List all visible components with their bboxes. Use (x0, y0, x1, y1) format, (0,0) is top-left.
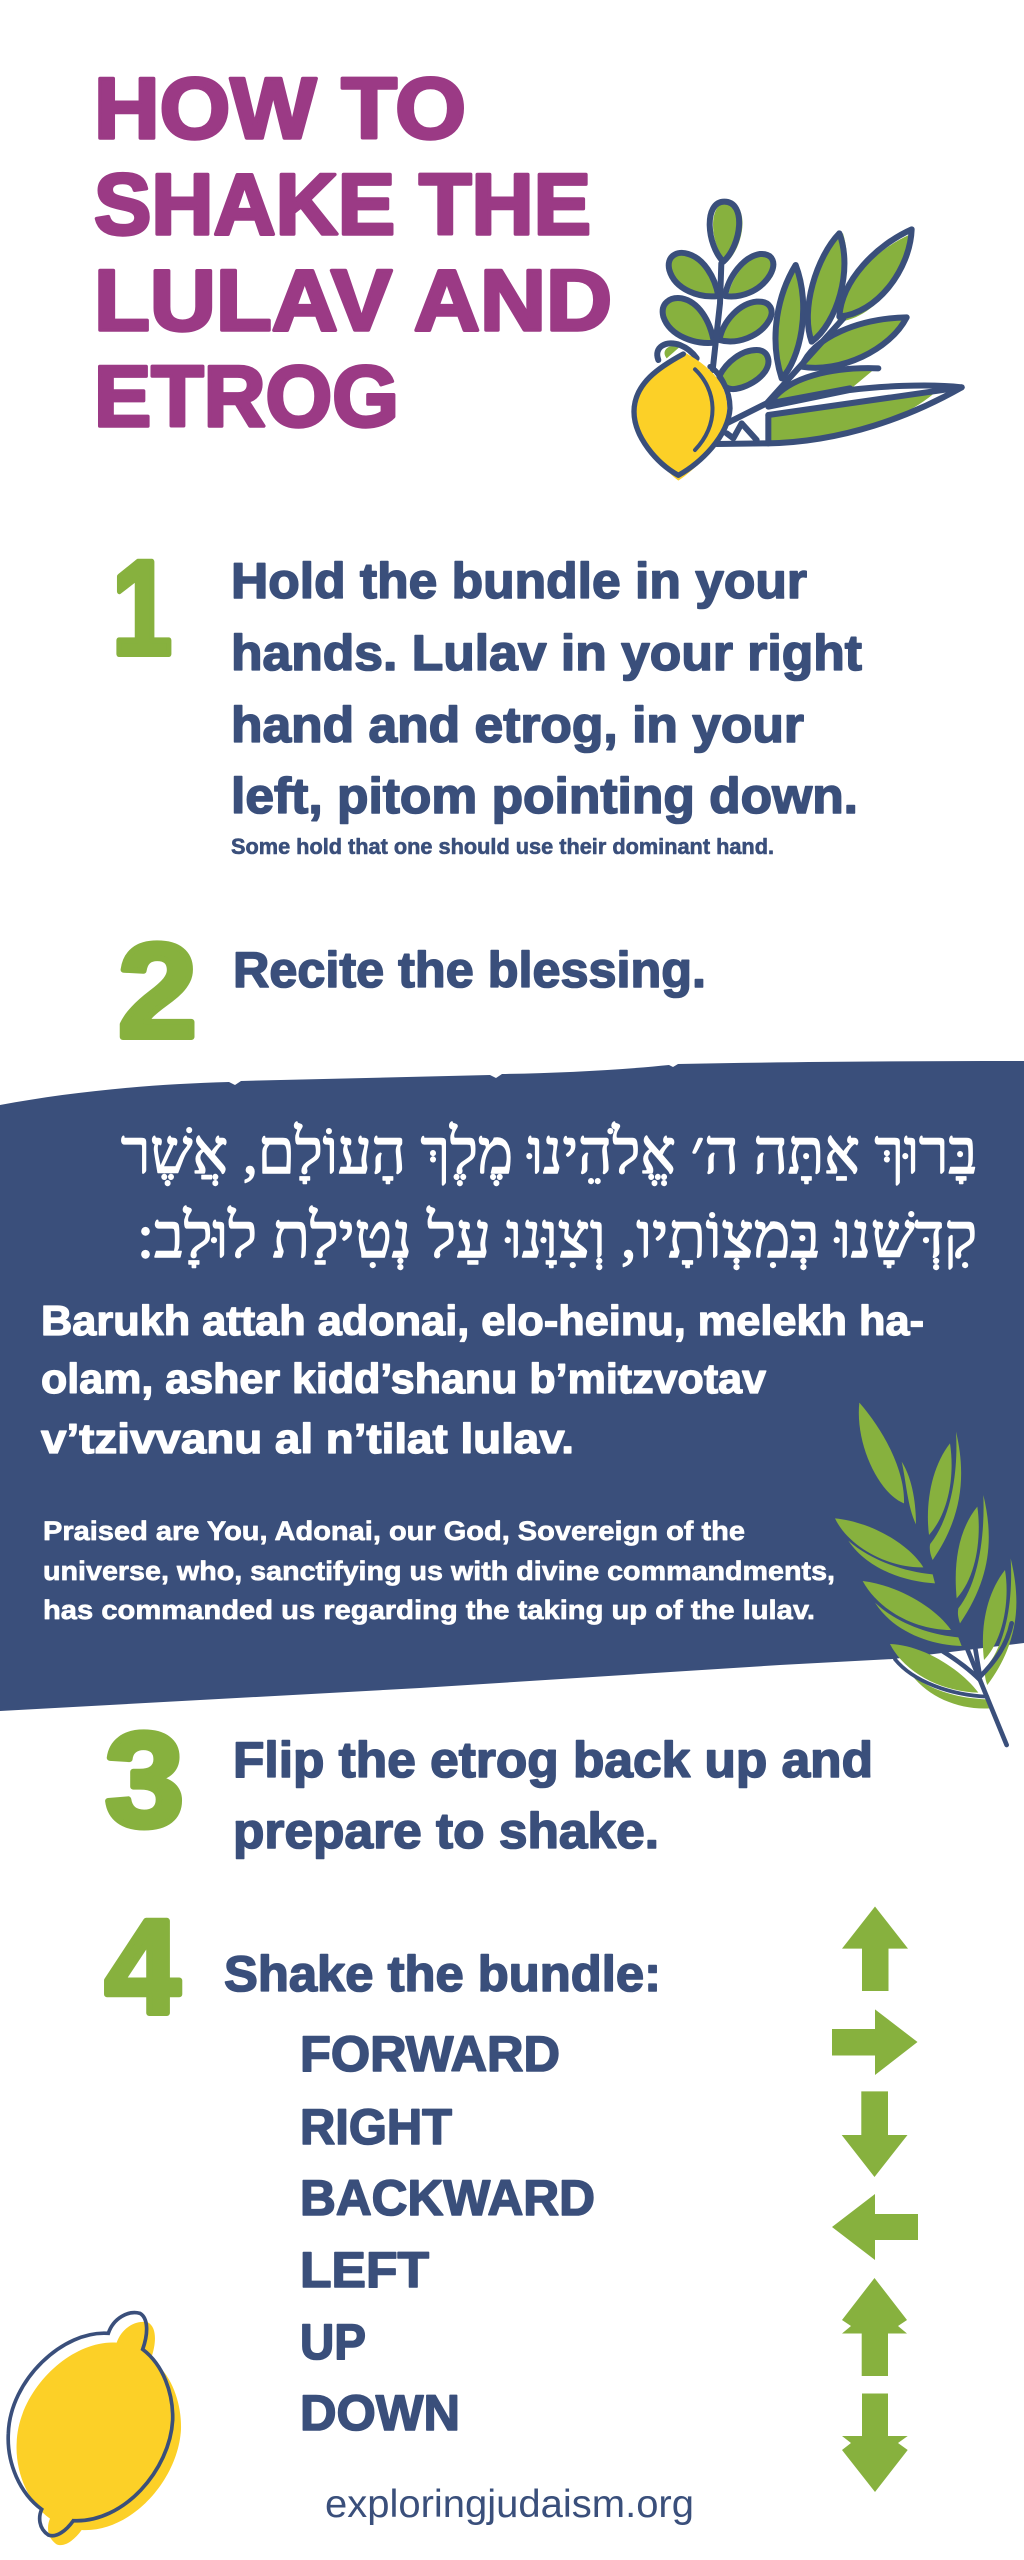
shake directions list: BACKWARD (300, 2170, 595, 2226)
blessing in Hebrew: קִדְּשָׁנוּ בְּמִצְוֹתָיו, וְצִוָּנוּ עַל נְטִילַת לוּלָב: (137, 1203, 977, 1271)
shake directions list (300, 2026, 595, 2441)
panel: blessing banner (0, 1061, 1024, 1711)
blessing in Hebrew (121, 1119, 977, 1271)
title: LULAV AND (94, 253, 612, 349)
English translation: universe, who, sanctifying us with divine commandments, (43, 1556, 835, 1586)
step 3 text: prepare to shake. (233, 1803, 659, 1859)
website footer: exploringjudaism.org (325, 2483, 694, 2526)
step 1 text: Hold the bundle in your (231, 553, 807, 609)
step 1 text: left, pitom pointing down. (231, 768, 858, 824)
shake directions list: RIGHT (300, 2099, 452, 2155)
arrow: right (832, 2009, 918, 2075)
title: HOW TO (94, 61, 466, 157)
arrow: forward (842, 1906, 908, 1991)
step 4 number: 4 (105, 1893, 180, 2042)
icon: etrog (8, 2313, 181, 2545)
shake directions list: DOWN (300, 2385, 460, 2441)
transliteration (41, 1297, 924, 1462)
transliteration: olam, asher kidd’shanu b’mitzvotav (41, 1355, 767, 1402)
English translation: Praised are You, Adonai, our God, Sovereign of the (43, 1516, 745, 1546)
transliteration: Barukh attah adonai, elo-heinu, melekh ha- (41, 1297, 924, 1344)
title (94, 61, 612, 445)
shake directions list: UP (300, 2314, 366, 2370)
step 4 heading: Shake the bundle: (224, 1946, 661, 2002)
shake directions list: LEFT (300, 2242, 429, 2298)
title: ETROG (94, 349, 399, 445)
blessing in Hebrew: בָּרוּךְ אַתָּה ה׳ אֱלֹהֵינוּ מֶלֶךְ הָעוֹלָם, אֲשֶׁר (121, 1119, 977, 1187)
English translation (43, 1516, 835, 1625)
step 3 text: Flip the etrog back up and (233, 1732, 873, 1788)
arrow: backward (842, 2091, 908, 2177)
step 1 number: 1 (112, 534, 172, 683)
shake directions list: FORWARD (300, 2026, 560, 2082)
title: SHAKE THE (94, 157, 591, 253)
English translation: has commanded us regarding the taking up of the lulav. (43, 1595, 815, 1625)
transliteration: v’tzivvanu al n’tilat lulav. (41, 1415, 574, 1462)
step 3 text (233, 1732, 873, 1859)
step 3 number: 3 (105, 1706, 184, 1855)
arrow: up (842, 2278, 907, 2376)
step 1 text: hand and etrog, in your (231, 697, 804, 753)
icon: lulav branch (835, 1403, 1016, 1745)
step 2 text: Recite the blessing. (233, 942, 706, 998)
arrow: left (832, 2194, 918, 2260)
arrow: down (842, 2394, 908, 2492)
step 2 number: 2 (118, 917, 197, 1066)
step 1 text (231, 553, 862, 859)
icon: lulav and etrog bundle (634, 202, 962, 481)
step 1 note: Some hold that one should use their dominant hand. (231, 834, 774, 859)
step 1 text: hands. Lulav in your right (231, 625, 862, 681)
